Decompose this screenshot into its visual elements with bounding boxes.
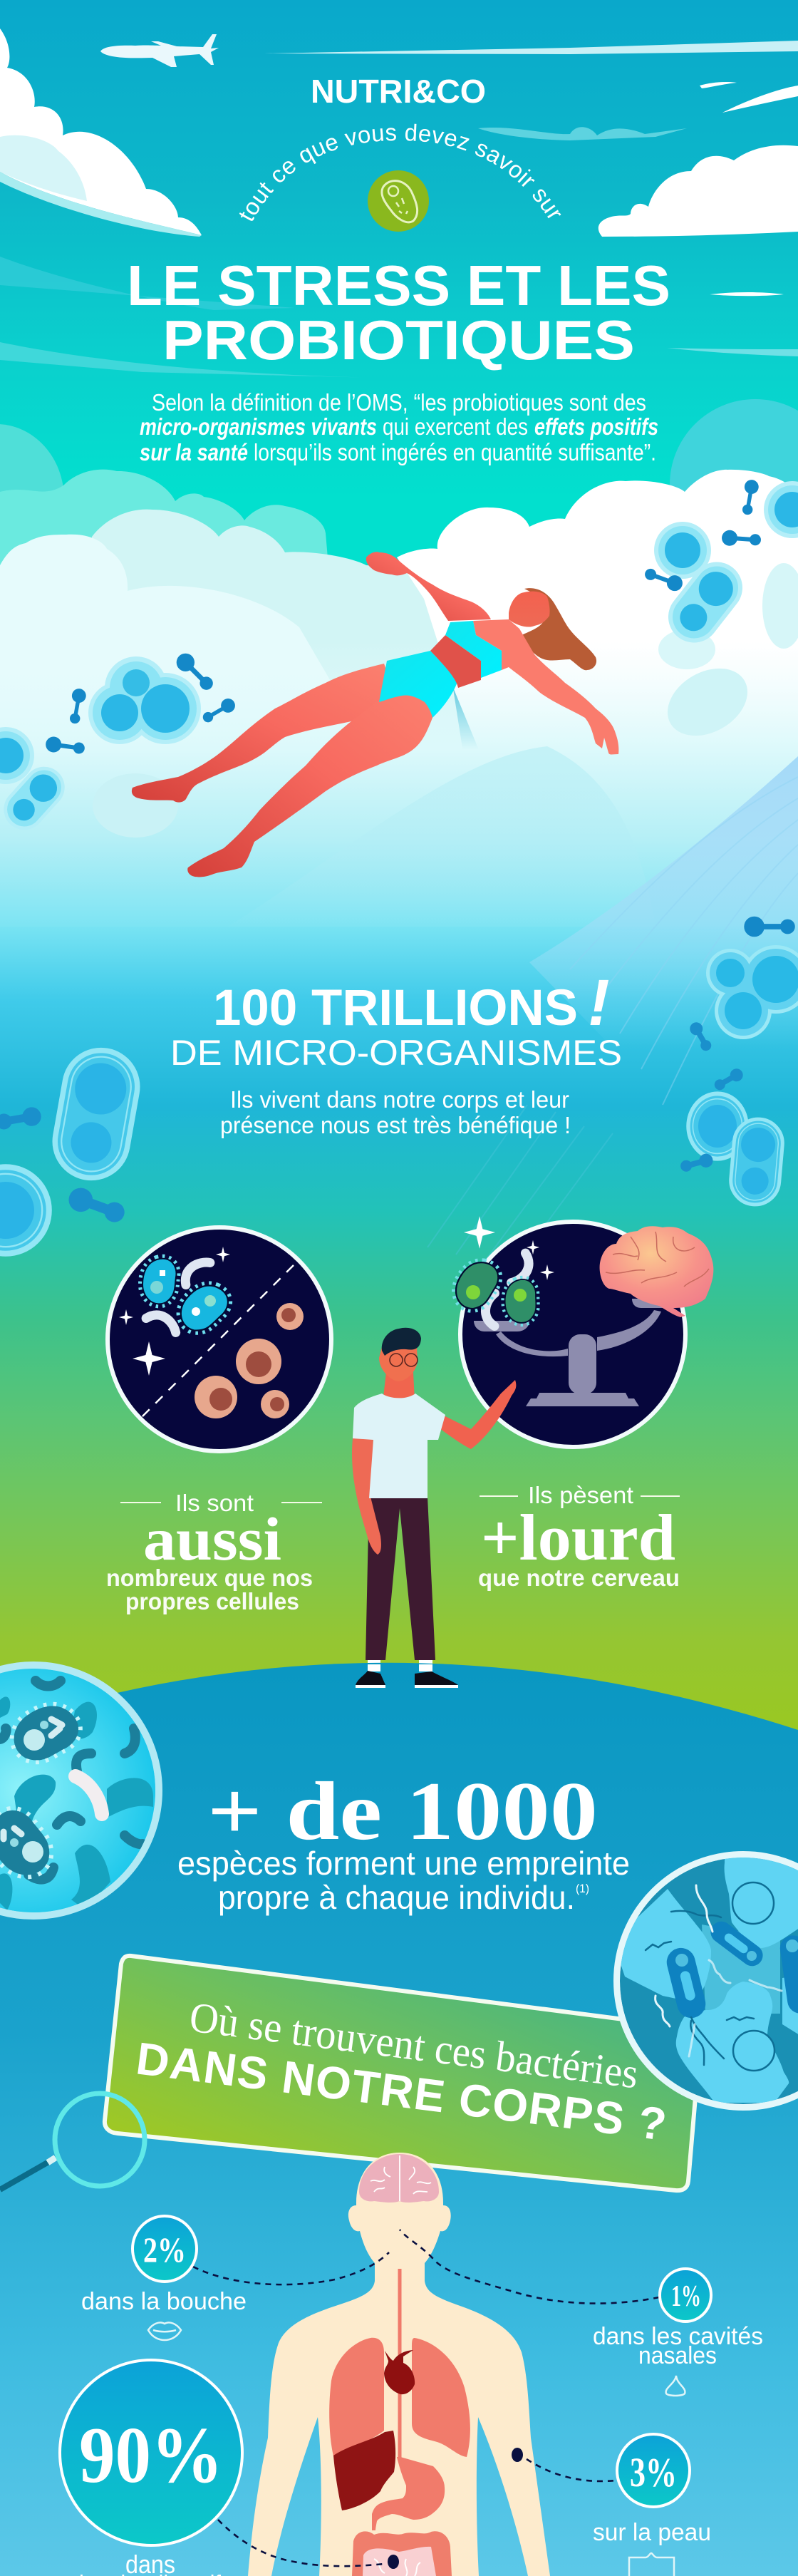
hair	[522, 588, 596, 670]
connector lines	[193, 2230, 659, 2566]
bikini bottom	[379, 651, 458, 718]
intro paragraph	[140, 389, 658, 465]
icon: bacteria green	[450, 1255, 539, 1326]
badge: 2% mouth	[81, 2216, 247, 2340]
heading: 100 trillions: 100 TRILLIONS	[213, 980, 578, 1036]
hair	[382, 1328, 421, 1356]
feet over dome	[356, 1664, 458, 1688]
stat: aussi nombreux: propres cellules	[125, 1588, 299, 1614]
sub text: présence nous est très bénéfique !	[220, 1112, 571, 1138]
intro paragraph: qui exercent des	[383, 413, 528, 440]
panel: question banner	[105, 1956, 700, 2190]
panel: question banner: DANS NOTRE CORPS ?	[133, 2032, 669, 2150]
intro paragraph: effets positifs	[534, 413, 658, 440]
intro paragraph: Selon la définition de l’OMS, “les probiotiques sont des	[152, 389, 646, 416]
circle: microbes vs cells	[108, 1227, 331, 1451]
badge: 90% gut: 90%	[79, 2411, 223, 2500]
panel: question banner: Où se trouvent ces bactéries	[187, 1993, 641, 2097]
stat: aussi nombreux	[106, 1490, 322, 1614]
cloud top right	[598, 145, 798, 237]
stomach	[372, 2457, 445, 2530]
waist	[430, 635, 481, 688]
icon: lips	[148, 2322, 181, 2340]
icon: magnifying glass	[0, 2093, 145, 2190]
leg front	[187, 684, 432, 877]
chest and far arm	[473, 619, 618, 754]
stat: plus lourd	[478, 1482, 680, 1591]
title: PROBIOTIQUES	[162, 309, 635, 371]
badge: 1% nose: nasales	[638, 2342, 717, 2369]
badge: 1% nose: 1%	[671, 2280, 701, 2313]
icon: green microbe badge	[368, 170, 429, 232]
shoes	[356, 1671, 458, 1688]
badge: 2% mouth: 2%	[143, 2230, 186, 2270]
esophagus	[398, 2269, 402, 2459]
title	[127, 254, 670, 371]
sky background	[0, 0, 798, 677]
circle: bacteria rods	[613, 1853, 798, 2107]
connector end dots	[388, 2448, 523, 2569]
icon: human cells	[195, 1303, 304, 1418]
intestines	[352, 2531, 452, 2576]
arc tagline: tout ce que vous devez savoir sur	[239, 124, 561, 221]
icon: bacteria blue	[142, 1259, 234, 1339]
intro paragraph: micro-organismes vivants	[140, 413, 377, 440]
heart	[384, 2350, 415, 2394]
stat: plus lourd: +lourd	[481, 1501, 675, 1574]
badge: 3% skin	[593, 2434, 711, 2576]
contrails and wisps	[0, 41, 798, 378]
badge: 3% skin: sur la peau	[593, 2519, 711, 2546]
mid-tone patch	[702, 1925, 780, 2014]
socks	[368, 1660, 432, 1671]
face	[379, 1347, 418, 1381]
heading: 100 trillions: DE MICRO-ORGANISMES	[170, 1033, 622, 1073]
sub text: Ils vivent dans notre corps et leur	[230, 1086, 569, 1113]
pale background circles	[0, 399, 798, 574]
woman floating	[132, 552, 618, 877]
blue dome background	[0, 1663, 798, 2576]
stat: aussi nombreux: aussi	[143, 1505, 281, 1573]
badge: 3% skin: 3%	[630, 2449, 677, 2495]
light regions	[613, 1853, 798, 2103]
icon: nose	[666, 2376, 685, 2396]
raised arm	[366, 552, 491, 621]
man left arm	[352, 1438, 381, 1555]
sub headline	[177, 1845, 630, 1916]
lower gradient background	[0, 927, 798, 1739]
badge: 90% gut	[60, 2360, 242, 2576]
heading: 100 trillions: !	[588, 967, 610, 1039]
man legs	[366, 1497, 435, 1660]
title: LE STRESS ET LES	[127, 254, 670, 317]
lavender wave with streaks	[428, 756, 798, 1269]
badge: 1% nose	[593, 2269, 763, 2396]
stat: plus lourd: que notre cerveau	[478, 1565, 680, 1591]
badge: 1% nose: dans les cavités	[593, 2323, 763, 2350]
sub headline: propre à chaque individu.	[218, 1879, 575, 1916]
heading: 100 trillions	[170, 967, 622, 1073]
face	[509, 592, 550, 627]
circle: scale with brain	[450, 1216, 713, 1447]
neck	[383, 1372, 415, 1403]
glasses	[390, 1354, 418, 1366]
bikini top	[445, 621, 502, 678]
stat: aussi nombreux: nombreux que nos	[106, 1565, 313, 1591]
cloud bank	[0, 470, 798, 934]
intro paragraph: sur la santé	[140, 439, 248, 465]
man raised arm	[436, 1380, 516, 1449]
microbes floating around swimmer	[0, 479, 798, 838]
icon: skin	[629, 2553, 674, 2576]
t-shirt	[353, 1393, 445, 1498]
headline: plus de 1000: + de 1000	[207, 1766, 598, 1858]
intro paragraph: lorsqu’ils sont ingérés en quantité suffisante”.	[254, 439, 656, 465]
circle: gut microbes	[0, 1665, 159, 1916]
stat: aussi nombreux: Ils sont	[175, 1490, 254, 1516]
plane	[100, 34, 219, 67]
leg back	[132, 664, 399, 803]
logo: NUTRI&CO	[311, 73, 486, 110]
lungs	[329, 2338, 470, 2457]
cloud top left	[0, 29, 202, 237]
pale cell shadows in clouds	[93, 563, 798, 838]
badge: 2% mouth: dans la bouche	[81, 2288, 247, 2315]
stat: plus lourd: Ils pèsent	[528, 1482, 633, 1508]
liver	[333, 2431, 395, 2510]
microbes around headline	[0, 917, 798, 1254]
human body diagram	[248, 2153, 550, 2576]
round microbes	[732, 1882, 774, 2071]
icon: brain	[600, 1226, 713, 1317]
rods	[663, 1917, 798, 2021]
sub headline: (1)	[576, 1882, 589, 1895]
icon: balance scale	[474, 1299, 670, 1406]
brain in head	[359, 2154, 439, 2203]
man	[352, 1328, 516, 1688]
sub text	[220, 1086, 571, 1138]
sub headline: espèces forment une empreinte	[177, 1845, 630, 1882]
